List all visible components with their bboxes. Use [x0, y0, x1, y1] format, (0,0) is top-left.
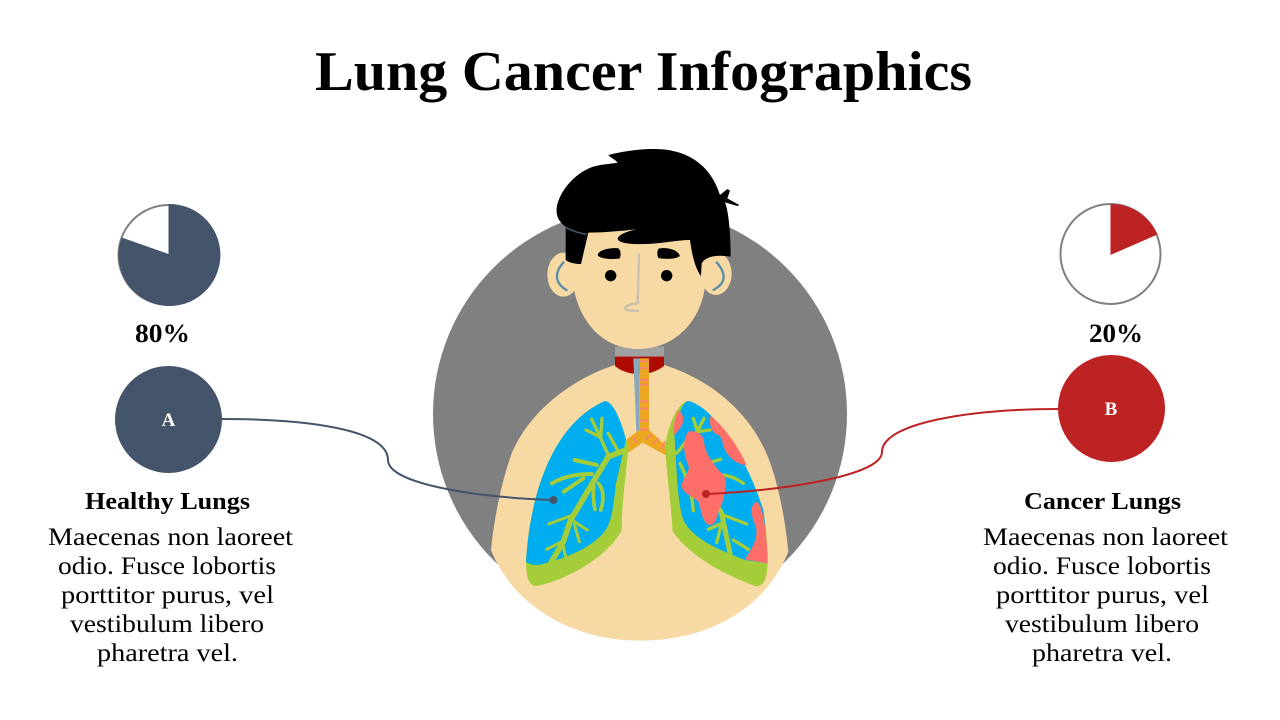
description: cancer lungs: pharetra vel. [1032, 640, 1172, 667]
eyes [605, 270, 672, 281]
gray background circle [433, 207, 847, 621]
torso [491, 365, 788, 641]
nose [625, 254, 639, 311]
pie chart: 20% [1060, 204, 1160, 304]
badge A [115, 366, 222, 473]
panel: healthy lungs [48, 204, 293, 667]
panel: central illustration [433, 149, 847, 641]
right lung bronchi [677, 418, 748, 553]
left lung air space [526, 401, 626, 565]
description: cancer lungs: vestibulum libero [1005, 611, 1199, 638]
hair [557, 149, 739, 276]
figure: head [547, 149, 739, 349]
connector: cancer lungs [702, 409, 1058, 498]
percentage: 20%: 20% [1089, 319, 1143, 348]
heading: healthy lungs: Healthy Lungs [85, 489, 250, 515]
neck [615, 347, 664, 360]
figure: torso and lungs [491, 347, 788, 641]
description: healthy lungs: vestibulum libero [70, 611, 264, 638]
hair highlight [566, 227, 587, 234]
right lung air space [674, 401, 767, 563]
left eyebrow [598, 248, 621, 259]
left lung tissue [526, 401, 628, 586]
title: Lung Cancer Infographics [315, 41, 972, 103]
description: cancer lungs: odio. Fusce lobortis [993, 553, 1211, 580]
panel: cancer lungs [983, 204, 1228, 667]
right lung: cancer [665, 401, 768, 586]
description: healthy lungs: porttitor purus, vel [61, 582, 274, 609]
connector: healthy lungs [222, 419, 558, 504]
ears [547, 252, 732, 297]
description: healthy lungs: odio. Fusce lobortis [58, 553, 276, 580]
description: cancer lungs: Maecenas non laoreet [983, 524, 1228, 551]
percentage: 80%: 80% [135, 319, 190, 348]
badge B [1058, 355, 1165, 462]
collar [615, 357, 664, 374]
windpipe [627, 358, 666, 455]
right eyebrow [657, 248, 680, 259]
right lung tissue [665, 401, 768, 586]
ear lines [557, 262, 724, 291]
description: healthy lungs: pharetra vel. [97, 640, 238, 667]
face [573, 223, 705, 349]
left lung: healthy [526, 401, 628, 586]
right lung tumours [674, 410, 768, 563]
badge B: B [1105, 399, 1118, 420]
left lung bronchi [547, 418, 626, 563]
pie chart: 80% [118, 204, 220, 306]
description: cancer lungs: porttitor purus, vel [996, 582, 1209, 609]
description: healthy lungs [48, 524, 293, 667]
badge A: A [162, 410, 176, 431]
description: healthy lungs: Maecenas non laoreet [48, 524, 293, 551]
description: cancer lungs [983, 524, 1228, 667]
heading: cancer lungs: Cancer Lungs [1024, 489, 1181, 515]
